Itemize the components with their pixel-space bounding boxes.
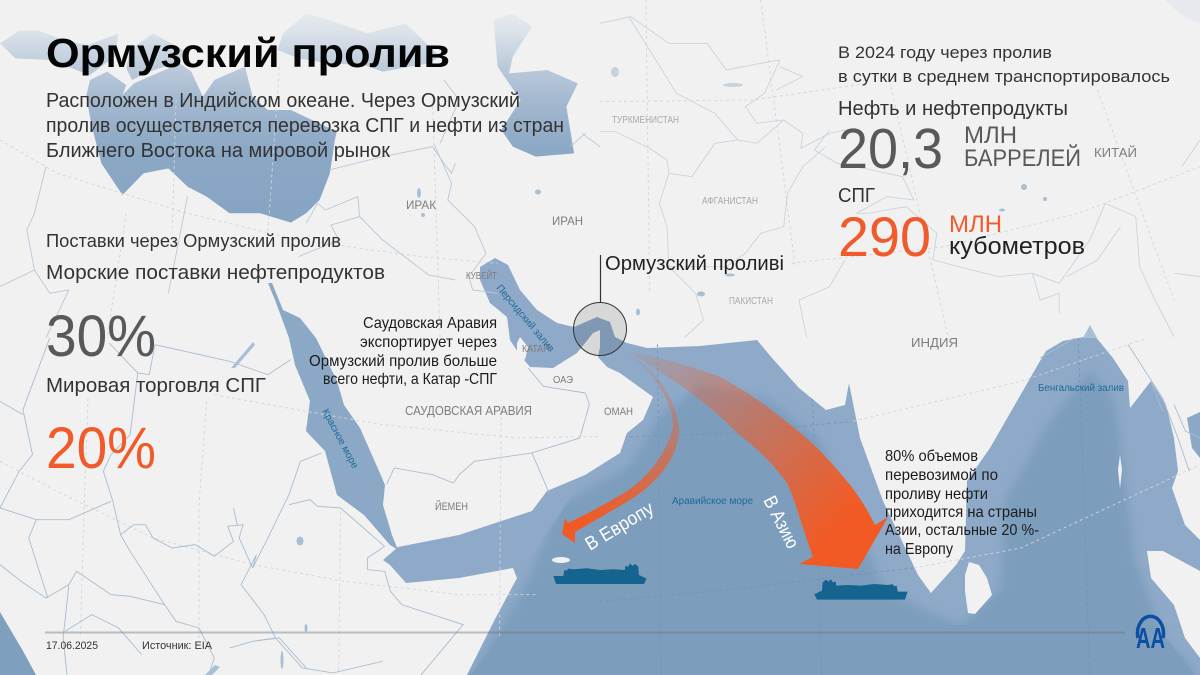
arrow label: to Asia: В Азию xyxy=(759,493,803,552)
map labels: seas xyxy=(319,283,1124,507)
text block: intro: Ближнего Востока на мировой рынок xyxy=(46,140,390,162)
land overlays: Sri Lanka, Sumatra, Qatar, Socotra, Andaman xyxy=(517,337,1200,658)
LNG label: СПГ xyxy=(838,185,875,207)
southwest coast sea xyxy=(0,612,36,675)
map labels: countries: ОМАН xyxy=(604,406,633,418)
text block: 80 percent note: перевозимой по xyxy=(885,467,998,484)
map labels: countries: КУВЕЙТ xyxy=(466,269,497,282)
map labels: countries: КАТАР xyxy=(522,344,549,355)
text block: 80 percent note: Азии, остальные 20 %- xyxy=(885,522,1039,539)
text block: intro: пролив осуществляется перевозка СПГ и нефти из стран xyxy=(46,115,564,137)
map labels: countries: ИНДИЯ xyxy=(911,335,958,350)
oil label: Морские поставки нефтепродуктов xyxy=(46,262,385,284)
arrow: to Europe xyxy=(562,355,679,543)
heading: title: Ормузский пролив xyxy=(46,30,450,76)
stat: 290 million cubic metres: кубометров xyxy=(949,233,1085,260)
text block: 80 percent note xyxy=(885,448,1039,558)
supplies heading: Поставки через Ормузский пролив xyxy=(46,231,341,251)
map labels: minor countries: ПАКИСТАН xyxy=(729,296,773,307)
icon: AA logo xyxy=(1136,616,1165,655)
stat: 290 million cubic metres: МЛН xyxy=(949,211,1002,238)
ship: Europe route xyxy=(553,563,647,584)
arrow label: to Europe: В Европу xyxy=(582,498,658,555)
stat: 20,3 million barrels: 20,3 xyxy=(838,117,943,181)
map labels: seas: Персидский залив xyxy=(494,283,556,354)
callout: Strait of Hormuz marker xyxy=(574,253,784,356)
map labels: minor countries: АФГАНИСТАН xyxy=(702,196,758,207)
text block: 80 percent note: на Европу xyxy=(885,541,953,558)
transport intro: в сутки в среднем транспортировалось xyxy=(838,67,1170,86)
stat: 290 million cubic metres: 290 xyxy=(838,205,931,268)
ship: Asia route xyxy=(814,579,908,600)
text block: 80 percent note: 80% объемов xyxy=(885,448,978,465)
stat: 20 percent: 20% xyxy=(46,416,156,481)
date: 17.06.2025 xyxy=(46,640,98,652)
text block: Saudi Arabia and Qatar note xyxy=(309,315,497,388)
text block: intro xyxy=(46,90,564,162)
text block: 80 percent note: приходится на страны xyxy=(885,504,1037,521)
map labels: countries: ЙЕМЕН xyxy=(435,500,468,513)
lakes xyxy=(205,67,1097,675)
map labels: countries: САУДОВСКАЯ АРАВИЯ xyxy=(405,403,532,418)
map labels: countries: ИРАН xyxy=(552,214,583,228)
Gulf of Thailand xyxy=(1187,412,1200,458)
Red Sea xyxy=(268,283,398,550)
panel: supplies through the strait xyxy=(46,231,385,481)
graticule over the ocean xyxy=(600,338,1090,675)
arrow: to Asia xyxy=(627,351,888,569)
Mediterranean, Black Sea and Caspian Sea xyxy=(0,13,578,223)
map labels: countries xyxy=(405,145,1137,513)
panel: daily transport 2024 xyxy=(838,43,1170,268)
LNG label: Мировая торговля СПГ xyxy=(46,375,266,397)
text block: Saudi Arabia and Qatar note: всего нефти, а Катар -СПГ xyxy=(323,371,497,388)
map labels: seas: Аравийское море xyxy=(672,496,753,507)
map labels: minor countries: ТУРКМЕНИСТАН xyxy=(612,115,679,126)
stat: 290 million cubic metres xyxy=(838,205,1085,268)
stat: 20,3 million barrels xyxy=(838,117,1081,181)
text block: 80 percent note: проливу нефти xyxy=(885,486,988,503)
map labels: minor countries xyxy=(612,115,773,307)
oil label: Нефть и нефтепродукты xyxy=(838,98,1068,120)
text block: Saudi Arabia and Qatar note: экспортирует через xyxy=(360,334,497,351)
Indian Ocean and Persian Gulf xyxy=(383,258,1200,675)
footer xyxy=(45,632,1125,652)
stat: 20,3 million barrels: БАРРЕЛЕЙ xyxy=(964,144,1081,172)
icon: AA logo: AA xyxy=(1136,623,1165,655)
map labels: countries: ИРАК xyxy=(406,198,436,212)
callout: Strait of Hormuz marker: Ормузский проливі xyxy=(605,253,784,275)
source: Источник: EIA xyxy=(142,640,213,652)
text block: Saudi Arabia and Qatar note: Ормузский пролив больше xyxy=(309,353,497,370)
text block: Saudi Arabia and Qatar note: Саудовская Аравия xyxy=(363,315,497,332)
deep ocean tone xyxy=(470,370,1200,675)
map labels: countries: ОАЭ xyxy=(553,375,573,386)
map labels: countries: КИТАЙ xyxy=(1094,145,1137,160)
stat: 30 percent: 30% xyxy=(46,304,156,369)
map labels: seas: Бенгальский залив xyxy=(1038,383,1124,394)
map labels: seas: Красное море xyxy=(319,407,360,471)
text block: intro: Расположен в Индийском океане. Через Ормузский xyxy=(46,90,520,112)
transport intro: В 2024 году через пролив xyxy=(838,43,1052,62)
stat: 20,3 million barrels: МЛН xyxy=(964,122,1017,149)
transport intro xyxy=(838,43,1170,86)
